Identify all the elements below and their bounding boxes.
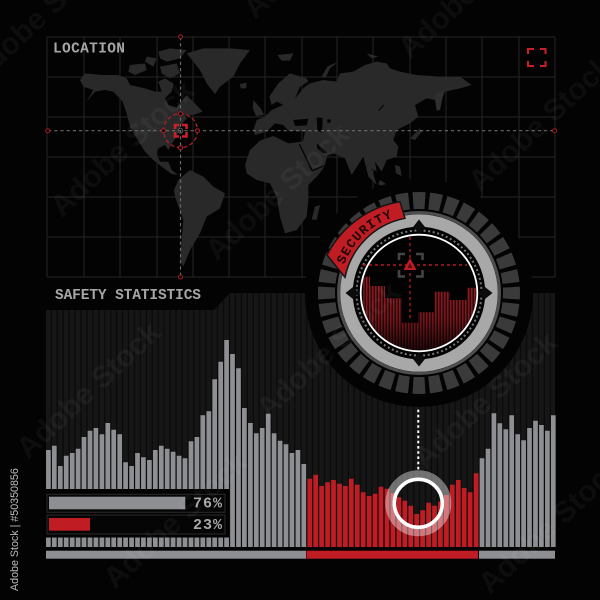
chart background (46, 293, 555, 547)
panel: location map (46, 35, 557, 279)
compass pointers (346, 220, 492, 366)
stock id text: Adobe Stock | #50350856 (9, 468, 21, 591)
dial black backing (305, 179, 533, 407)
progress bar: 76% (47, 494, 225, 513)
map grid (47, 37, 555, 277)
panel: safety statistics (46, 288, 555, 559)
stock watermarks: Adobe Stock (44, 74, 201, 223)
lens crosshair (363, 237, 467, 321)
magnifier ring on chart (389, 474, 447, 532)
progress bar: 76%: 76% (193, 496, 223, 513)
security ribbon: SECURITY (337, 210, 390, 264)
location target marker (162, 112, 200, 150)
lens white rim (361, 235, 477, 351)
percentage panel (46, 489, 229, 538)
progress bar: 23%: 23% (193, 517, 223, 534)
timeline bar (46, 551, 555, 559)
world map: africa and eurasia (240, 53, 472, 233)
stock watermarks: Adobe Stock (250, 276, 407, 425)
dashed connector line (417, 394, 419, 472)
dotted ring (356, 230, 482, 356)
focus brackets icon (528, 49, 546, 66)
map crosshair lines (48, 37, 555, 277)
security ribbon (326, 201, 406, 279)
lens target (399, 254, 422, 276)
segmented outer ring (326, 200, 512, 386)
stock watermarks: Adobe Stock (407, 326, 564, 475)
stock watermarks: Adobe Stock (10, 316, 167, 465)
heading: safety statistics: SAFETY STATISTICS (55, 288, 201, 304)
bar chart: red section (310, 473, 476, 547)
progress bar: 23% (47, 515, 225, 534)
bar chart: gray right (482, 413, 553, 547)
lens chart (360, 277, 480, 353)
world map: americas and greenland (80, 48, 250, 267)
heading: location: LOCATION (53, 41, 125, 57)
stock watermarks: Adobe Stock (199, 118, 356, 267)
security dial (305, 179, 532, 407)
stock watermarks: Adobe Stock (97, 446, 254, 595)
gray rings (338, 212, 500, 374)
map crosshair end markers (46, 35, 557, 279)
bar chart: gray left (48, 340, 304, 547)
